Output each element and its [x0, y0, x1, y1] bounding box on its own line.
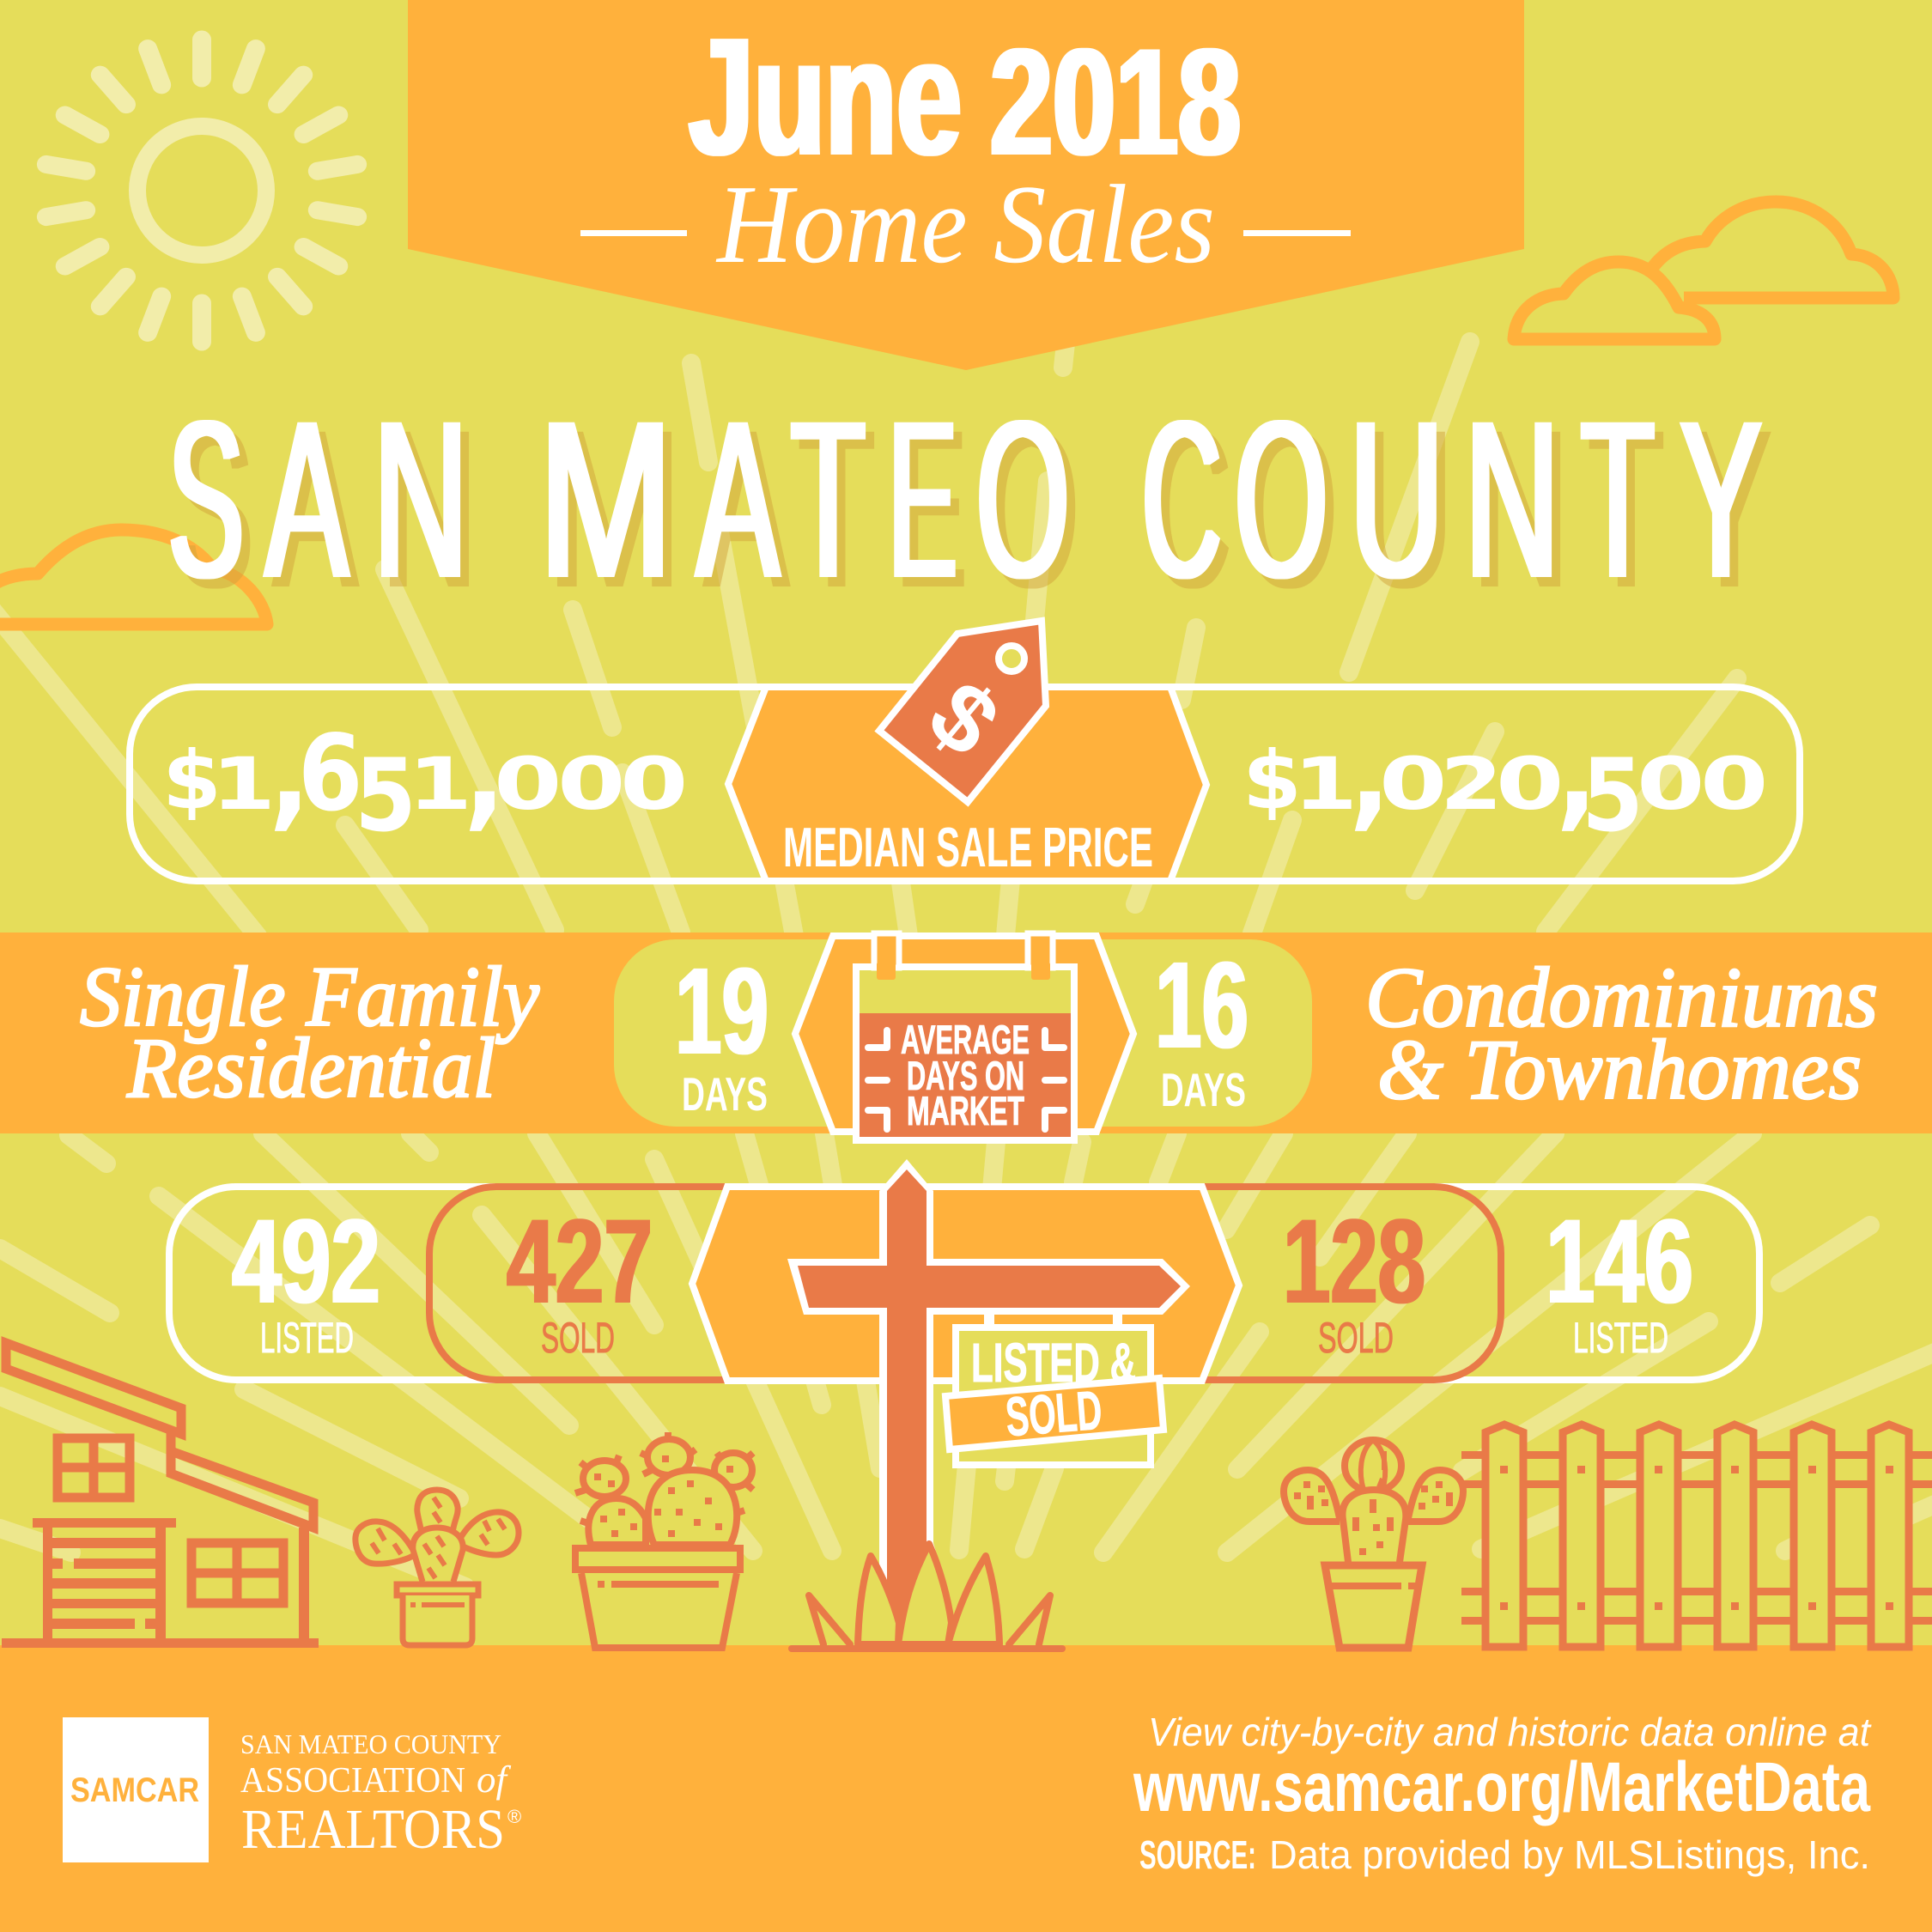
- icon: hanging sign board: DAYS ON: [907, 1053, 1024, 1098]
- icon: signpost: [787, 1159, 1190, 1644]
- logo: SAMCAR square: [63, 1717, 209, 1862]
- label: single family residential: [80, 949, 540, 1115]
- heading shadow: San Mateo County: N: [382, 383, 477, 635]
- value: single family listed: [232, 1194, 380, 1362]
- value: condo price: 5: [1582, 737, 1643, 854]
- title: June 2018: June: [689, 3, 962, 191]
- subtitle: Home Sales: [580, 162, 1351, 287]
- icon: hanging sign board: [856, 933, 1074, 1140]
- value: condo sold: [1283, 1194, 1425, 1362]
- value: condo price: ,: [1349, 703, 1391, 843]
- title: June 2018: 2018: [990, 16, 1241, 187]
- value: single family price: 1: [408, 742, 472, 826]
- banner: title ribbon: [408, 0, 1524, 370]
- logo: association name: REALTORS: [241, 1798, 505, 1861]
- value: single family price: 6: [298, 713, 362, 835]
- icon: house: [2, 1343, 319, 1648]
- value: single family price: ,: [269, 703, 311, 843]
- icon: price tag: [879, 621, 1046, 802]
- icon: picket fence: [1461, 1425, 1932, 1647]
- panel: median sale price: [130, 621, 1800, 881]
- value: single family sold: [507, 1194, 653, 1362]
- icon: sun: [46, 39, 357, 342]
- heading shadow: San Mateo County: C: [1151, 383, 1230, 635]
- subtitle: Home Sales: Home Sales: [715, 162, 1215, 287]
- sign: listed and sold: [945, 1327, 1163, 1465]
- heading shadow: San Mateo County: A: [705, 383, 788, 635]
- heading shadow: San Mateo County: M: [547, 383, 682, 635]
- heading: San Mateo County: T: [791, 374, 866, 625]
- days hexagon: [795, 936, 1133, 1132]
- label: median sale price: MEDIAN SALE PRICE: [783, 816, 1153, 878]
- icon: hanging sign board: AVERAGE: [901, 1017, 1030, 1062]
- heading shadow: San Mateo County: O: [1243, 383, 1336, 635]
- label: condominiums and townhomes: & Townhomes: [1377, 1022, 1862, 1117]
- heading shadow: San Mateo County: A: [274, 383, 357, 635]
- heading: San Mateo County: N: [1465, 374, 1559, 625]
- value: single family price: $: [162, 734, 222, 828]
- heading: San Mateo County: O: [1235, 374, 1327, 625]
- heading: San Mateo County: S: [168, 374, 244, 625]
- value: condo listed: [1546, 1194, 1693, 1362]
- text: source: SOURCE:: [1139, 1832, 1256, 1877]
- value: condo sold: 128: [1283, 1194, 1425, 1328]
- value: condo listed: LISTED: [1573, 1314, 1668, 1362]
- value: condo price: ,: [1556, 703, 1598, 843]
- heading: San Mateo County: U: [1350, 374, 1443, 625]
- sign: listed and sold: LISTED &: [971, 1332, 1136, 1394]
- logo: SAMCAR square: SAMCAR: [70, 1771, 199, 1809]
- value: single family days: DAYS: [682, 1067, 768, 1121]
- value: condo price: $: [1242, 734, 1302, 828]
- logo: association name: [240, 1728, 521, 1861]
- value: condo price: 0: [1700, 742, 1769, 826]
- value: single family price: 5: [355, 737, 416, 854]
- label: single family residential: Single Family: [80, 949, 540, 1044]
- value: condo days: 16: [1155, 936, 1249, 1074]
- label: condominiums and townhomes: [1365, 950, 1878, 1117]
- heading shadow: San Mateo County: Y: [1688, 383, 1771, 635]
- heading: San Mateo County: T: [1581, 374, 1655, 625]
- value: single family days: [675, 942, 769, 1121]
- logo: association name: of: [477, 1759, 512, 1801]
- sign: listed and sold: SOLD: [1004, 1379, 1104, 1448]
- footer band: [0, 1645, 1932, 1932]
- text: source: Data provided by MLSListings, Inc.: [1269, 1832, 1870, 1877]
- heading shadow: San Mateo County: T: [1589, 383, 1663, 635]
- heading: San Mateo County: M: [538, 374, 673, 625]
- value: single family price: ,: [464, 703, 506, 843]
- heading: San Mateo County: O: [976, 374, 1069, 625]
- logo: association name: SAN MATEO COUNTY: [240, 1728, 501, 1759]
- label: single family residential: Residential: [126, 1020, 495, 1115]
- icon: price tag: $: [909, 659, 1019, 776]
- value: single family listed: 492: [232, 1194, 380, 1328]
- listed sold hexagon: [692, 1187, 1239, 1381]
- value: single family days: 19: [675, 942, 769, 1080]
- icon: large potted cactus: [575, 1432, 753, 1648]
- value: single family sold: SOLD: [541, 1314, 615, 1362]
- heading shadow: San Mateo County: N: [1473, 383, 1568, 635]
- icon: small potted cactus: [355, 1490, 519, 1645]
- icon: right potted cactus: [1284, 1440, 1463, 1648]
- panel: days on market band: [0, 933, 1932, 1140]
- value: condo price: 0: [1379, 742, 1448, 826]
- value: single family price: 0: [557, 742, 625, 826]
- days pill: [614, 939, 1312, 1127]
- heading: San Mateo County: C: [1142, 374, 1221, 625]
- median price hexagon: [728, 687, 1206, 881]
- label: condominiums and townhomes: Condominiums: [1365, 950, 1878, 1045]
- value: single family listed: LISTED: [260, 1314, 354, 1362]
- value: condo price: 1: [1293, 742, 1358, 826]
- text: view data online: View city-by-city and historic data online at: [1148, 1710, 1872, 1754]
- value: condo price: 2: [1440, 742, 1503, 826]
- heading shadow: San Mateo County: [177, 383, 1771, 635]
- value: condo days: DAYS: [1161, 1063, 1246, 1116]
- value: single family price: 0: [620, 742, 689, 826]
- heading: San Mateo County: N: [374, 374, 468, 625]
- value: condo listed: 146: [1546, 1194, 1693, 1328]
- logo: association name: ASSOCIATION: [240, 1761, 465, 1801]
- value: condo days: [1155, 936, 1249, 1116]
- icon: grass: [792, 1544, 1062, 1649]
- heading shadow: San Mateo County: O: [985, 383, 1078, 635]
- value: single family sold: 427: [507, 1194, 653, 1328]
- panel: listed and sold: [169, 1187, 1759, 1381]
- logo: association name: ®: [507, 1806, 521, 1827]
- value: condo sold: SOLD: [1318, 1314, 1394, 1362]
- heading shadow: San Mateo County: E: [897, 383, 965, 635]
- value: condo price: 0: [1496, 742, 1564, 826]
- heading shadow: San Mateo County: U: [1358, 383, 1452, 635]
- heading shadow: San Mateo County: T: [799, 383, 874, 635]
- heading: San Mateo County: E: [889, 374, 957, 625]
- value: single family price: 1: [211, 742, 276, 826]
- heading: San Mateo County: A: [265, 374, 349, 625]
- icon: clouds top right: [1514, 202, 1893, 339]
- icon: cloud left: [0, 530, 267, 624]
- heading: San Mateo County: Y: [1680, 374, 1762, 625]
- icon: hanging sign board: MARKET: [907, 1088, 1024, 1133]
- value: condo price: 0: [1637, 742, 1705, 826]
- value: single family price: 0: [494, 742, 562, 826]
- heading: San Mateo County: A: [696, 374, 780, 625]
- heading shadow: San Mateo County: S: [177, 383, 252, 635]
